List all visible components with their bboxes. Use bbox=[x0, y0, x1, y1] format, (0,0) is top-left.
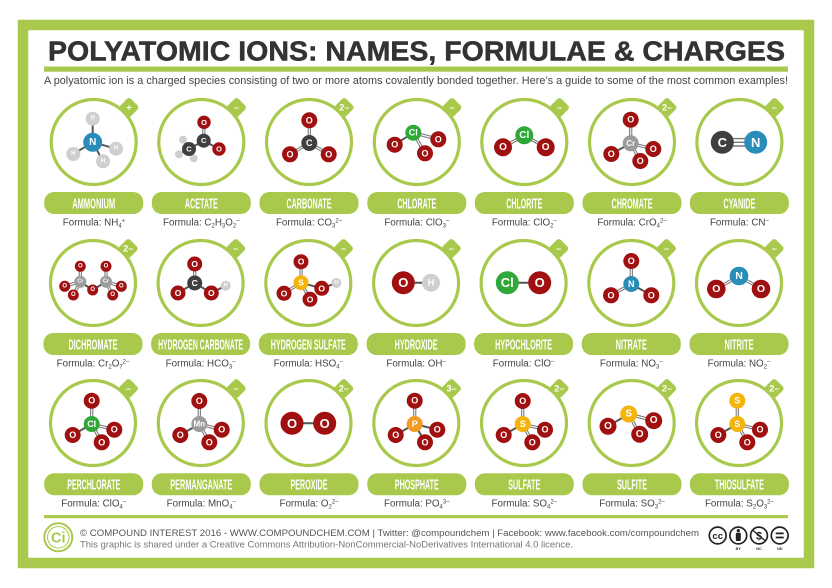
icon: hypochlorite molecule: O bbox=[535, 275, 545, 290]
formula: 2 bbox=[233, 224, 237, 230]
icon: nitrite molecule: O bbox=[712, 283, 720, 295]
charge tag: 2– bbox=[123, 244, 133, 254]
formula: – bbox=[340, 359, 344, 365]
icon: peroxide molecule bbox=[266, 380, 351, 466]
icon: sulfite molecule bbox=[589, 380, 674, 466]
formula: Formula: C bbox=[163, 218, 211, 228]
icon: carbonate molecule: O bbox=[325, 149, 332, 159]
icon: permanganate molecule: O bbox=[218, 425, 225, 435]
panel: perchlorate bbox=[44, 378, 143, 510]
formula: – bbox=[551, 359, 555, 365]
icon: nitrate molecule: O bbox=[628, 256, 635, 266]
icon: hydrogen sulfate molecule: O bbox=[307, 294, 314, 304]
icon: hydrogen sulfate molecule: O bbox=[318, 283, 325, 293]
icon: perchlorate molecule: O bbox=[88, 396, 95, 406]
formula: 3 bbox=[229, 364, 233, 370]
icon: permanganate molecule bbox=[158, 380, 243, 466]
icon: hydrogen sulfate molecule bbox=[266, 240, 351, 326]
formula: 2– bbox=[660, 218, 667, 224]
icon: dichromate molecule: O bbox=[90, 287, 95, 293]
panel: thiosulfate bbox=[690, 378, 789, 510]
icon: hypochlorite molecule: Cl bbox=[501, 275, 514, 290]
formula: – bbox=[446, 218, 450, 224]
icon: sulfate molecule: O bbox=[541, 425, 549, 435]
icon: sulfate molecule: O bbox=[519, 396, 526, 406]
formula: Formula: OH bbox=[386, 358, 442, 369]
panel: acetate bbox=[152, 97, 251, 229]
name pill: DICHROMATE bbox=[68, 337, 118, 353]
icon: perchlorate molecule: O bbox=[69, 430, 76, 440]
name pill: CHROMATE bbox=[612, 196, 653, 212]
panel: nitrate bbox=[582, 238, 681, 370]
icon: perchlorate molecule: Cl bbox=[87, 419, 96, 429]
formula: Formula: O bbox=[279, 498, 328, 510]
icon: chromate molecule: O bbox=[627, 115, 634, 125]
name pill: HYPOCHLORITE bbox=[495, 337, 552, 353]
formula: – bbox=[233, 500, 237, 506]
formula: 4 bbox=[229, 504, 233, 510]
panel: hypochlorite bbox=[474, 238, 573, 369]
icon: carbonate molecule: O bbox=[306, 115, 313, 125]
icon: dichromate molecule: Cr bbox=[77, 279, 84, 285]
formula: Formula: SO bbox=[599, 498, 655, 510]
icon: nitrate molecule: N bbox=[628, 279, 635, 289]
icon: hydrogen sulfate molecule: S bbox=[298, 278, 304, 288]
icon: permanganate molecule: O bbox=[206, 437, 213, 447]
charge tag: 3– bbox=[446, 384, 457, 394]
icon: ammonium molecule: H bbox=[114, 146, 118, 152]
footer licence: This graphic is shared under a Creative Commons Attribution-NonCommercial-NoDerivatives International 4.0 licence. bbox=[80, 538, 573, 549]
icon: creative commons badges: BY bbox=[736, 547, 741, 551]
formula: Formula: CO bbox=[276, 218, 332, 228]
name pill: SULFITE bbox=[617, 478, 647, 494]
name pill: CHLORITE bbox=[506, 196, 542, 212]
panel: nitrite bbox=[690, 238, 788, 370]
charge tag: – bbox=[449, 102, 455, 112]
formula: 2– bbox=[550, 500, 558, 506]
icon: chlorate molecule: O bbox=[421, 148, 429, 158]
icon: ammonium molecule: H bbox=[91, 116, 95, 122]
formula: Formula: SO bbox=[492, 498, 547, 510]
icon: creative commons badges: NC bbox=[756, 547, 762, 551]
icon: nitrite molecule bbox=[696, 240, 782, 326]
formula: 2– bbox=[123, 359, 130, 365]
icon: permanganate molecule: O bbox=[177, 430, 184, 440]
icon: chlorite molecule: Cl bbox=[519, 130, 530, 141]
icon: hydrogen carbonate molecule: C bbox=[192, 278, 198, 288]
name pill: HYDROGEN CARBONATE bbox=[158, 337, 243, 353]
formula: 3 bbox=[764, 504, 768, 510]
formula: O bbox=[112, 358, 120, 369]
icon: nitrate molecule: O bbox=[648, 290, 655, 300]
icon: chlorite molecule: O bbox=[542, 142, 550, 153]
panel: chlorate bbox=[367, 97, 466, 229]
formula: 4 bbox=[336, 364, 340, 370]
icon: dichromate molecule: O bbox=[71, 292, 76, 298]
icon: nitrate molecule: O bbox=[607, 290, 615, 300]
panel: phosphate bbox=[367, 378, 466, 510]
charge tag: + bbox=[126, 102, 132, 112]
icon: cyanide molecule bbox=[697, 100, 782, 184]
formula: – bbox=[553, 218, 557, 224]
icon: thiosulfate molecule: O bbox=[744, 437, 751, 447]
name pill: SULFATE bbox=[508, 478, 540, 494]
icon: compound interest logo bbox=[44, 523, 72, 551]
formula: 2– bbox=[332, 500, 339, 506]
title: POLYATOMIC IONS: NAMES, FORMULAE & CHARGES bbox=[48, 36, 785, 66]
icon: hydrogen carbonate molecule: O bbox=[191, 259, 198, 269]
panel: permanganate bbox=[152, 378, 251, 510]
charge tag: – bbox=[556, 244, 561, 254]
icon: hydrogen carbonate molecule: H bbox=[224, 283, 228, 289]
icon: nitrite molecule: N bbox=[735, 270, 743, 282]
icon: chromate molecule bbox=[590, 100, 674, 184]
charge tag: – bbox=[233, 244, 238, 254]
icon: creative commons badges: ND bbox=[777, 547, 783, 551]
formula: 3– bbox=[443, 500, 450, 506]
name pill: CHLORATE bbox=[397, 196, 436, 212]
charge tag: – bbox=[772, 102, 777, 112]
charge tag: 2– bbox=[339, 384, 349, 394]
formula: – bbox=[232, 359, 236, 365]
charge tag: – bbox=[557, 102, 562, 112]
formula: 2 bbox=[108, 364, 112, 370]
formula: Formula: CN bbox=[710, 218, 765, 228]
icon: ammonium molecule: N bbox=[89, 137, 96, 148]
icon: sulfite molecule: O bbox=[636, 429, 644, 440]
formula: Formula: MnO bbox=[167, 498, 229, 510]
icon: phosphate molecule: O bbox=[421, 437, 429, 447]
name pill: CYANIDE bbox=[723, 196, 756, 212]
icon: hydroxide molecule bbox=[374, 240, 459, 326]
panel: sulfite bbox=[582, 378, 682, 510]
icon: perchlorate molecule bbox=[50, 380, 136, 466]
charge tag: – bbox=[234, 102, 239, 112]
formula: 4 bbox=[440, 504, 444, 510]
formula: Formula: NO bbox=[708, 358, 764, 369]
icon: dichromate molecule: O bbox=[78, 263, 83, 269]
panel: hydrogen sulfate bbox=[259, 238, 358, 370]
panel: cyanide bbox=[690, 97, 789, 228]
formula: Formula: S bbox=[705, 498, 753, 510]
charge tag: 2– bbox=[662, 384, 672, 394]
formula: – bbox=[659, 359, 663, 365]
icon: dichromate molecule: Cr bbox=[103, 279, 110, 285]
formula: Formula: HCO bbox=[166, 358, 229, 369]
icon: permanganate molecule: O bbox=[196, 396, 203, 406]
charge tag: – bbox=[772, 244, 777, 254]
name pill: NITRATE bbox=[616, 337, 647, 353]
icon: hydrogen carbonate molecule: O bbox=[208, 288, 215, 298]
formula: 4 bbox=[547, 504, 551, 510]
formula: + bbox=[122, 218, 126, 224]
icon: phosphate molecule: P bbox=[412, 419, 418, 429]
icon: chlorate molecule: O bbox=[391, 140, 398, 150]
charge tag: 2– bbox=[662, 102, 672, 112]
icon: hydroxide molecule: H bbox=[428, 278, 434, 288]
formula: 4 bbox=[119, 504, 123, 510]
icon: peroxide molecule: O bbox=[287, 416, 297, 431]
charge tag: 2– bbox=[769, 384, 779, 394]
name pill: AMMONIUM bbox=[72, 196, 115, 212]
formula: Formula: PO bbox=[384, 498, 440, 510]
icon: sulfate molecule: S bbox=[520, 419, 526, 429]
formula: 2– bbox=[767, 500, 775, 506]
name pill: PHOSPHATE bbox=[395, 478, 439, 494]
charge tag: – bbox=[664, 244, 669, 254]
icon: perchlorate molecule: O bbox=[98, 437, 105, 447]
formula: 4 bbox=[657, 224, 661, 230]
formula: 2 bbox=[211, 224, 215, 230]
icon: peroxide molecule: O bbox=[320, 416, 330, 431]
formula: 2 bbox=[764, 364, 768, 370]
formula: – bbox=[442, 359, 446, 365]
icon: dichromate molecule bbox=[50, 240, 136, 326]
panel: hydrogen carbonate bbox=[151, 238, 250, 370]
icon: acetate molecule: O bbox=[201, 118, 207, 127]
formula: 2– bbox=[335, 218, 343, 224]
icon: hydrogen carbonate molecule: O bbox=[175, 288, 182, 298]
formula: – bbox=[767, 359, 771, 365]
icon: acetate molecule: C bbox=[186, 144, 192, 154]
icon: thiosulfate molecule: S bbox=[734, 419, 740, 429]
icon: thiosulfate molecule: O bbox=[756, 425, 764, 435]
icon: creative commons badges bbox=[709, 527, 788, 551]
icon: sulfite molecule: O bbox=[604, 421, 612, 432]
charge tag: – bbox=[449, 244, 454, 254]
charge tag: – bbox=[126, 384, 131, 394]
formula: O bbox=[756, 498, 764, 510]
icon: dichromate molecule: O bbox=[119, 283, 124, 289]
charge tag: 2– bbox=[339, 102, 349, 112]
icon: hydroxide molecule: O bbox=[398, 275, 408, 290]
formula: Formula: Cr bbox=[57, 358, 108, 369]
icon: phosphate molecule: O bbox=[434, 425, 441, 435]
panel: dichromate bbox=[44, 238, 142, 370]
formula: 3 bbox=[222, 224, 226, 230]
formula: 2– bbox=[658, 500, 665, 506]
icon: creative commons badges: $ bbox=[756, 530, 762, 542]
icon: thiosulfate molecule bbox=[696, 380, 782, 466]
formula: 4 bbox=[118, 224, 122, 230]
icon: permanganate molecule: Mn bbox=[194, 420, 205, 428]
charge tag: – bbox=[341, 244, 346, 254]
formula: 7 bbox=[119, 364, 123, 370]
icon: chromate molecule: O bbox=[650, 144, 657, 154]
name pill: CARBONATE bbox=[286, 196, 332, 212]
formula: O bbox=[225, 218, 233, 228]
name pill: NITRITE bbox=[724, 337, 754, 353]
icon: chlorite molecule: O bbox=[499, 142, 507, 153]
icon: cyanide molecule: C bbox=[718, 135, 728, 150]
formula: Formula: ClO bbox=[61, 498, 119, 510]
icon: acetate molecule: O bbox=[216, 144, 222, 154]
name pill: PERMANGANATE bbox=[170, 478, 232, 494]
formula: H bbox=[215, 218, 222, 228]
name pill: HYDROGEN SULFATE bbox=[271, 337, 346, 353]
formula: Formula: ClO bbox=[384, 218, 443, 228]
name pill: HYDROXIDE bbox=[395, 337, 438, 353]
icon: chlorite molecule bbox=[482, 100, 567, 184]
panel: chromate bbox=[582, 97, 682, 229]
icon: chlorate molecule: O bbox=[435, 134, 442, 144]
icon: carbonate molecule bbox=[266, 100, 352, 184]
formula: – bbox=[236, 218, 240, 224]
icon: sulfate molecule bbox=[482, 380, 566, 466]
formula: 3 bbox=[656, 364, 660, 370]
icon: hydrogen sulfate molecule: O bbox=[281, 288, 288, 298]
icon: hydrogen carbonate molecule bbox=[158, 240, 243, 326]
formula: Formula: NH bbox=[63, 218, 118, 228]
icon: acetate molecule bbox=[159, 100, 244, 184]
icon: compound interest logo: Ci bbox=[51, 530, 66, 546]
icon: acetate molecule: C bbox=[201, 136, 207, 145]
icon: sulfite molecule: S bbox=[625, 408, 632, 420]
icon: dichromate molecule: O bbox=[62, 283, 67, 289]
name pill: PERCHLORATE bbox=[67, 478, 120, 494]
footer credits: © COMPOUND INTEREST 2016 - WWW.COMPOUNDCHEM.COM | Twitter: @compoundchem | Facebook: www.facebook.com/compoundchem bbox=[80, 528, 699, 539]
formula: Formula: CrO bbox=[597, 218, 657, 228]
panel: ammonium bbox=[44, 97, 143, 229]
name pill: ACETATE bbox=[185, 196, 218, 212]
charge tag: 2– bbox=[554, 384, 564, 394]
icon: phosphate molecule: O bbox=[392, 430, 399, 440]
icon: sulfate molecule: O bbox=[529, 437, 536, 447]
icon: chromate molecule: Cr bbox=[626, 139, 635, 148]
formula: 2 bbox=[328, 504, 332, 510]
icon: nitrate molecule bbox=[589, 240, 674, 326]
icon: chromate molecule: O bbox=[608, 149, 615, 159]
icon: sulfite molecule: O bbox=[650, 415, 658, 426]
intro text: A polyatomic ion is a charged species consisting of two or more atoms covalently bonded together. Here’s a guide to some of the most common examples! bbox=[44, 75, 788, 87]
formula: Formula: ClO bbox=[493, 358, 551, 369]
formula: 3 bbox=[332, 224, 336, 230]
icon: hypochlorite molecule bbox=[481, 240, 566, 326]
icon: thiosulfate molecule: O bbox=[715, 430, 722, 440]
icon: creative commons badges: cc bbox=[712, 531, 724, 542]
formula: – bbox=[765, 218, 769, 224]
panel: peroxide bbox=[260, 378, 358, 510]
panel: hydroxide bbox=[367, 238, 466, 369]
formula: Formula: HSO bbox=[274, 358, 336, 369]
icon: phosphate molecule bbox=[374, 380, 459, 466]
charge tag: – bbox=[234, 384, 239, 394]
formula: Formula: NO bbox=[600, 358, 656, 369]
icon: chromate molecule: O bbox=[637, 156, 644, 166]
icon: ammonium molecule: H bbox=[101, 158, 105, 164]
icon: dichromate molecule: O bbox=[104, 263, 109, 269]
formula: Formula: ClO bbox=[492, 218, 550, 228]
icon: ammonium molecule: H bbox=[71, 151, 75, 157]
formula: 2 bbox=[550, 224, 554, 230]
icon: sulfate molecule: O bbox=[500, 430, 507, 440]
icon: thiosulfate molecule: S bbox=[734, 396, 740, 406]
icon: hydrogen sulfate molecule: O bbox=[298, 257, 305, 267]
icon: dichromate molecule: O bbox=[110, 292, 115, 298]
formula: 2 bbox=[753, 504, 757, 510]
formula: – bbox=[123, 500, 127, 506]
icon: cyanide molecule: N bbox=[751, 135, 760, 150]
icon: hydrogen sulfate molecule: H bbox=[334, 280, 338, 286]
formula: 3 bbox=[655, 504, 659, 510]
name pill: PEROXIDE bbox=[290, 478, 328, 494]
icon: ammonium molecule bbox=[51, 100, 136, 184]
icon: perchlorate molecule: O bbox=[111, 425, 118, 435]
panel: carbonate bbox=[260, 97, 358, 229]
icon: nitrite molecule: O bbox=[757, 283, 765, 295]
icon: chlorate molecule: Cl bbox=[409, 128, 418, 138]
icon: chlorate molecule bbox=[374, 100, 459, 184]
panel: chlorite bbox=[475, 97, 574, 229]
panel: sulfate bbox=[475, 378, 574, 510]
name pill: THIOSULFATE bbox=[715, 478, 764, 494]
formula: 3 bbox=[443, 224, 447, 230]
icon: carbonate molecule: C bbox=[306, 138, 313, 148]
icon: carbonate molecule: O bbox=[286, 149, 294, 159]
icon: phosphate molecule: O bbox=[411, 396, 418, 406]
